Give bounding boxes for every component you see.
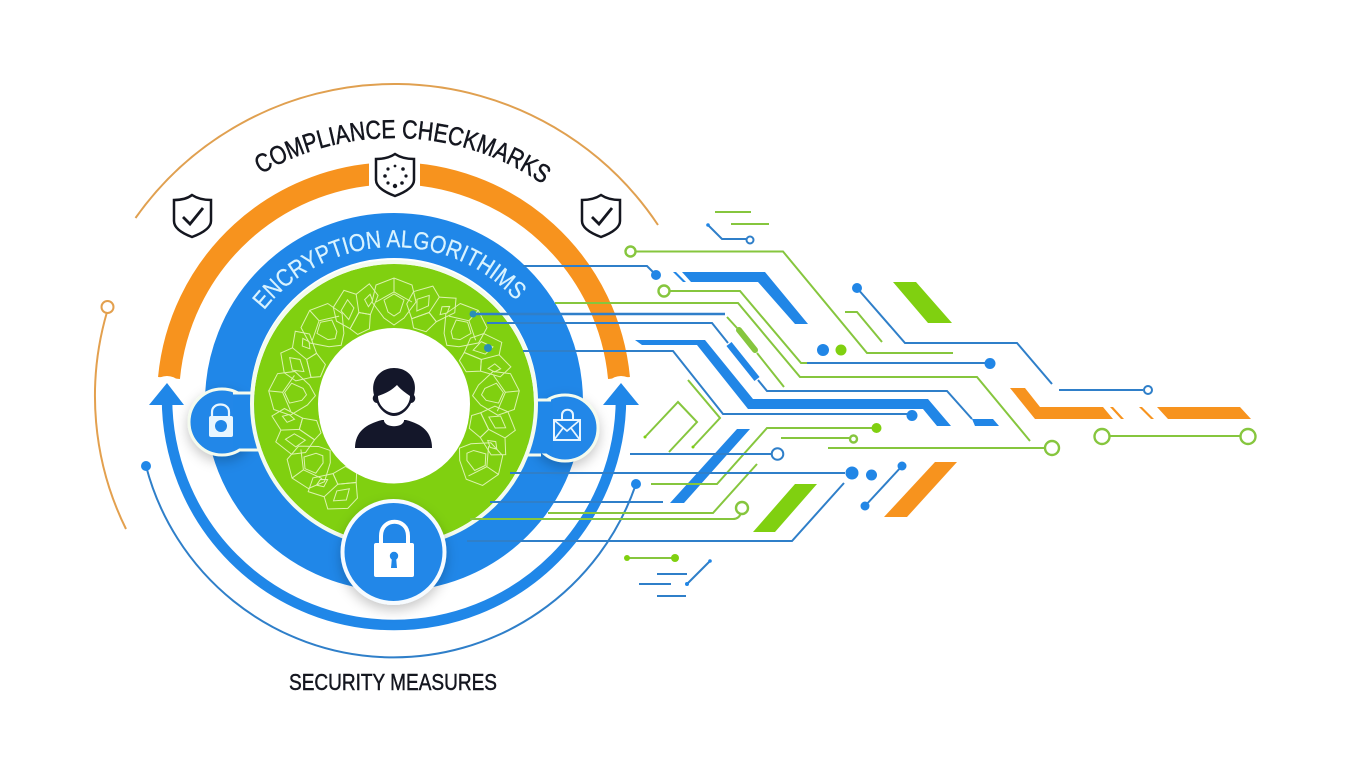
icon: left lock badge: [189, 389, 262, 455]
circuit: blue traces: [467, 225, 1143, 596]
circuit: blue nodes: [470, 223, 1152, 586]
heading: encryption algorithms: ENCRYPTION ALGORITHIMS: [252, 230, 526, 310]
icon: centre shield dots: [376, 154, 414, 196]
circuit: green parallelograms: [753, 282, 952, 532]
circuit: orange shapes: [884, 388, 1251, 517]
arrow: left: [149, 383, 184, 405]
compliance orange arc: [169, 173, 619, 378]
blue encryption ring: [228, 236, 560, 568]
arrow: right: [603, 383, 639, 405]
circuit: green nodes: [624, 246, 1256, 562]
white centre disc: [318, 332, 470, 484]
icon: right shield check: [582, 195, 620, 237]
ring white outline: [252, 262, 536, 546]
green ring: [286, 296, 502, 512]
heading: compliance checkmarks: COMPLIANCE CHECKMARKS: [256, 120, 550, 182]
encryption pattern on green ring: [266, 278, 522, 519]
arc end notches: [150, 150, 638, 410]
thick blue security arc: [167, 398, 621, 625]
heading: security measures: SECURITY MEASURES: [289, 669, 497, 695]
thin orange outer arc: [136, 84, 658, 225]
thin orange left arc with ring: [95, 301, 126, 529]
icon: left shield check: [174, 195, 211, 237]
circuit: blue capsule: [729, 344, 757, 379]
circuit: green traces: [470, 212, 1248, 558]
circuit: blue bands: [635, 272, 999, 503]
icon: right envelope badge: [525, 395, 598, 461]
thin blue security arc with dots: [141, 461, 641, 657]
icon: bottom lock badge: [342, 501, 444, 603]
icon: person: [355, 368, 432, 448]
circuit: green capsule: [739, 330, 755, 350]
